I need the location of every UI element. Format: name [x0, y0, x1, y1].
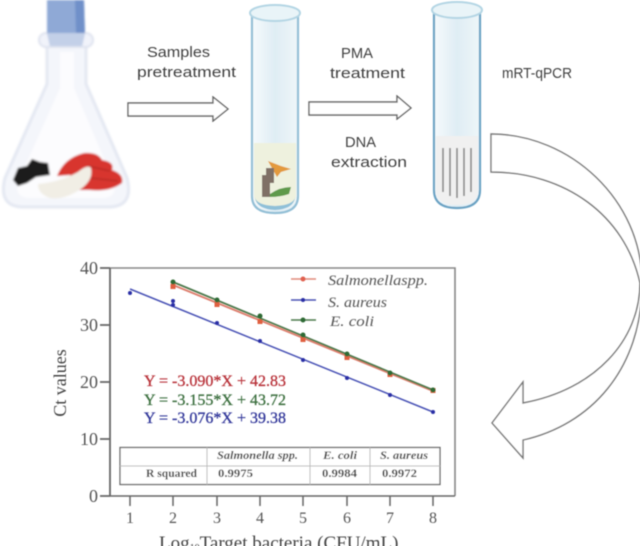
R squared table: 0.9972 — [382, 468, 417, 480]
text: samples pretreatment: Samples — [147, 44, 210, 61]
icon: test tube with extract — [432, 2, 482, 208]
R squared table: E. coli — [322, 450, 358, 462]
x axis: 8 — [429, 510, 437, 527]
y axis title: Ct values — [50, 349, 70, 417]
regression equations — [144, 373, 286, 427]
R squared table: S. aureus — [380, 450, 429, 462]
y axis: 10 — [80, 429, 98, 449]
R squared table: 0.9984 — [322, 468, 357, 480]
chart frame — [110, 268, 455, 496]
text: PMA treatment: PMA — [341, 45, 373, 62]
legend: S. aureus — [328, 295, 387, 311]
text: mRT-qPCR: mRT-qPCR — [502, 65, 572, 82]
tube rim — [432, 2, 482, 18]
text: DNA extraction: extraction — [331, 154, 407, 171]
x axis: 6 — [343, 510, 351, 527]
text: PMA treatment — [330, 45, 406, 82]
liquid — [254, 143, 296, 208]
x axis — [110, 496, 455, 527]
series: E. coli — [170, 280, 436, 392]
x axis: 7 — [386, 510, 394, 527]
orange sample — [268, 161, 291, 177]
brown sample — [262, 168, 274, 197]
tube rim — [250, 5, 300, 21]
icon: flask with samples — [3, 0, 129, 207]
white sample — [38, 167, 91, 198]
stopper — [47, 0, 85, 46]
text: samples pretreatment: pretreatment — [137, 64, 237, 81]
arrow: curved to chart — [491, 134, 640, 458]
regression equations: Y = -3.090*X + 42.83 — [144, 373, 286, 390]
series: S. aureus — [128, 289, 435, 414]
icon: test tube with sample — [250, 5, 300, 213]
text: PMA treatment: treatment — [330, 65, 406, 82]
text: DNA extraction: DNA — [345, 134, 376, 151]
black sample — [13, 159, 50, 186]
R squared table: R squared — [146, 468, 198, 480]
R squared table: 0.9975 — [218, 468, 253, 480]
R squared table — [120, 448, 440, 484]
text: DNA extraction — [331, 134, 407, 171]
y axis: 30 — [80, 315, 98, 335]
arrow: pretreatment — [128, 97, 228, 121]
text: samples pretreatment — [137, 44, 237, 81]
series: Salmonella spp. — [170, 284, 436, 393]
legend — [291, 273, 428, 330]
y axis: 40 — [80, 258, 98, 278]
reaction lines — [443, 148, 471, 198]
x axis: 3 — [213, 510, 221, 527]
extract liquid — [436, 136, 478, 205]
y axis — [80, 258, 110, 506]
x axis: 1 — [126, 510, 134, 527]
arrow: PMA and DNA extraction — [309, 96, 411, 119]
x axis: 2 — [169, 510, 177, 527]
y axis: 0 — [89, 486, 98, 506]
legend: E. coli — [329, 314, 374, 330]
red sample — [57, 153, 122, 190]
R squared table: Salmonella spp. — [217, 450, 298, 462]
legend: Salmonellaspp. — [328, 273, 428, 289]
green sample — [270, 187, 291, 197]
regression equations: Y = -3.155*X + 43.72 — [144, 392, 286, 409]
line chart: Ct values — [50, 258, 455, 546]
x axis: 5 — [299, 510, 307, 527]
x axis: 4 — [256, 510, 264, 527]
regression equations: Y = -3.076*X + 39.38 — [144, 410, 286, 427]
flask collar — [39, 33, 93, 47]
y axis: 20 — [80, 372, 98, 392]
flask body — [3, 46, 129, 207]
